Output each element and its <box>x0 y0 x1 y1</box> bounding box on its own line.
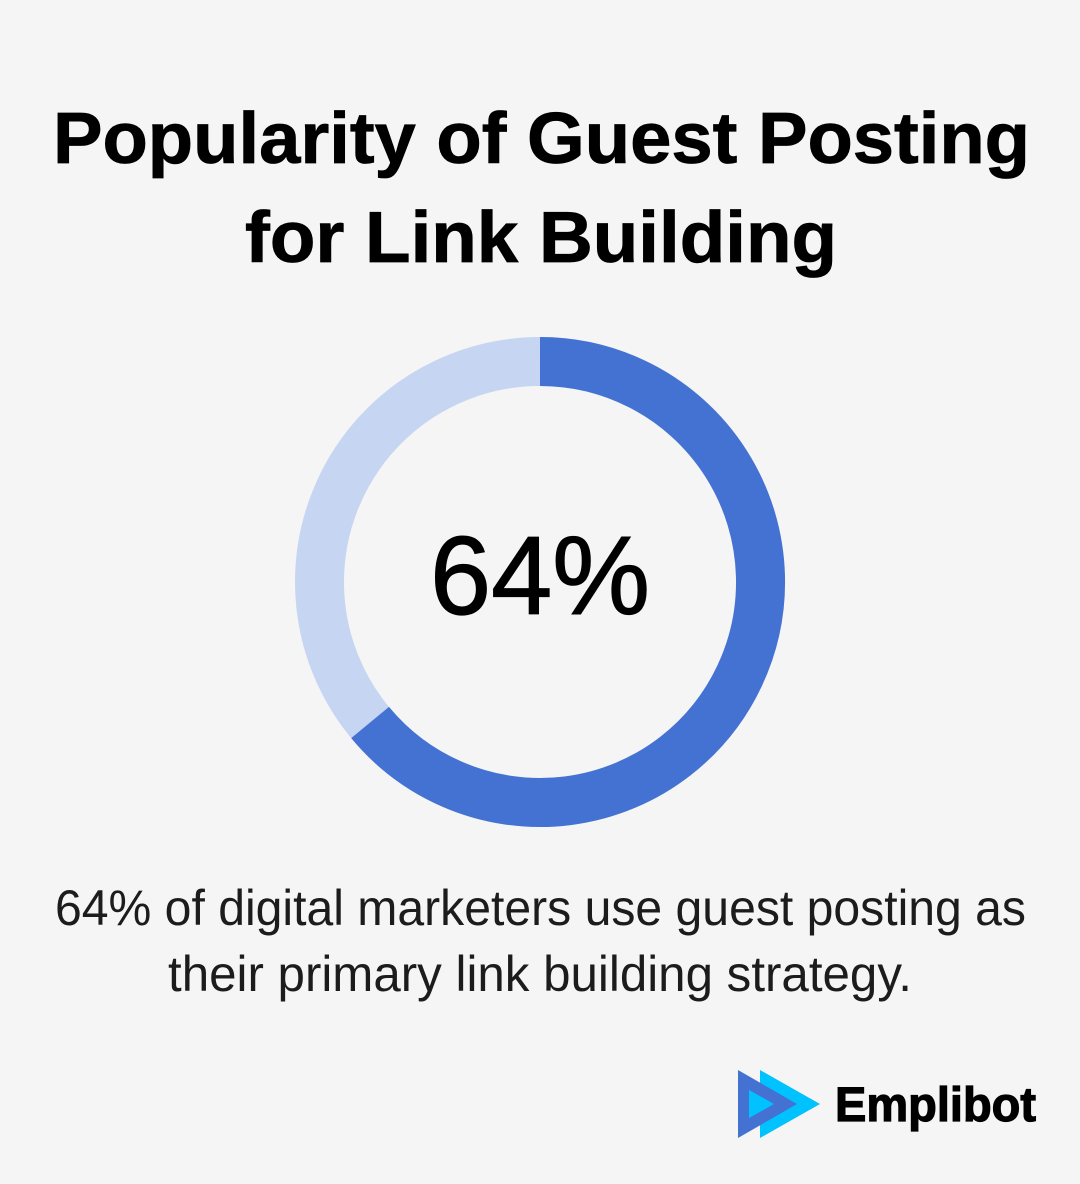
brand logo <box>738 1070 1036 1138</box>
description text: 64% of digital marketers use guest posting as <box>55 880 1026 936</box>
description text: their primary link building strategy. <box>168 946 912 1002</box>
donut chart: 64% <box>320 361 761 802</box>
title <box>53 99 1030 278</box>
title: for Link Building <box>245 198 837 278</box>
wordmark: Emplibot <box>835 1079 1036 1132</box>
icon: double play triangles <box>738 1070 820 1138</box>
highlighted 64% arc <box>370 361 761 802</box>
title: Popularity of Guest Posting <box>53 99 1030 179</box>
description text <box>55 880 1026 1002</box>
remaining 36% arc <box>320 362 760 802</box>
center value: 64% <box>430 514 650 638</box>
